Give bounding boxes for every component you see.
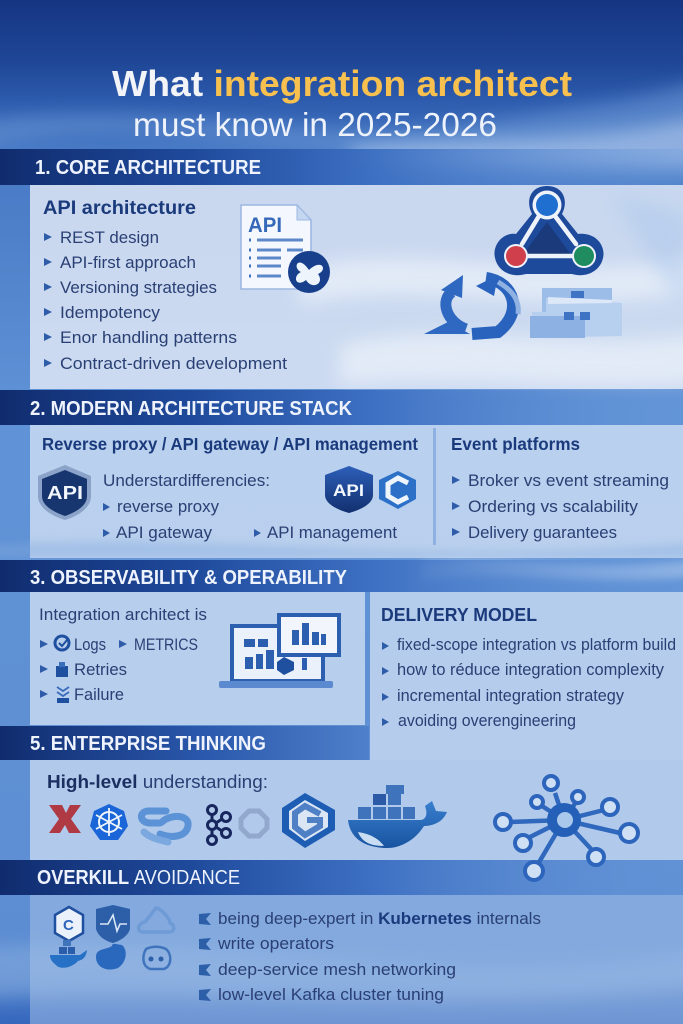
icon: cloud bbox=[139, 908, 174, 932]
list: overkill items: write operators bbox=[217, 934, 334, 953]
icon: hexagon C bbox=[379, 471, 416, 509]
icon: X bbox=[49, 805, 81, 833]
list: delivery model bbox=[382, 635, 676, 730]
text: high-level understanding: High-level understanding: bbox=[47, 772, 268, 792]
icon: blue swirl bbox=[141, 811, 188, 842]
icon: shield pulse bbox=[96, 905, 130, 943]
icon: kafka bbox=[208, 806, 230, 844]
icon: speech bubble bbox=[143, 947, 170, 969]
list: API architecture topics bbox=[44, 228, 287, 373]
heading: delivery model: DELIVERY MODEL bbox=[381, 605, 537, 625]
list: overkill items bbox=[199, 909, 541, 1004]
icon: kubernetes bbox=[90, 804, 128, 840]
icon: hub and spoke network bbox=[495, 776, 638, 880]
icon: laptop dashboards bbox=[219, 615, 339, 688]
list: observability items: Logs bbox=[74, 635, 106, 654]
icon: API shield: API bbox=[47, 483, 83, 503]
title: What integration architect bbox=[112, 63, 572, 104]
icon: API document bbox=[241, 205, 330, 293]
section 1 header bar: 1. CORE ARCHITECTURE bbox=[35, 157, 261, 179]
text: differences: Understardifferencies: bbox=[103, 471, 270, 490]
list: delivery model: incremental integration strategy bbox=[397, 686, 624, 705]
section 3 header bar bbox=[0, 560, 683, 592]
list: observability items: Failure bbox=[74, 685, 124, 704]
panel: delivery model bbox=[370, 592, 683, 760]
section 5 header bar bbox=[0, 726, 369, 760]
icon: API document: API bbox=[248, 214, 282, 237]
icon: hexagon C small: C bbox=[63, 917, 74, 934]
list: delivery model: how to réduce integration complexity bbox=[397, 660, 664, 679]
section overkill header bar bbox=[0, 860, 683, 895]
list: gateway items: API gateway bbox=[116, 523, 212, 542]
list: API architecture topics: Versioning strategies bbox=[60, 278, 217, 297]
heading: event platforms: Event platforms bbox=[451, 434, 580, 454]
section 5 header bar: 5. ENTERPRISE THINKING bbox=[30, 733, 266, 755]
section 2 header bar: 2. MODERN ARCHITECTURE STACK bbox=[30, 398, 353, 420]
list: API architecture topics: Contract-driven development bbox=[60, 354, 287, 373]
panel: observability bbox=[30, 592, 365, 725]
icon: isometric boxes bbox=[530, 288, 622, 338]
list: API architecture topics: Idempotency bbox=[60, 303, 161, 322]
list: gateway items: API management bbox=[267, 523, 397, 542]
section overkill header bar: OVERKILL AVOIDANCE bbox=[37, 867, 240, 889]
list: observability items: Retries bbox=[74, 660, 127, 679]
icon: hexagon C small bbox=[55, 907, 83, 941]
panel: modern architecture stack bbox=[0, 425, 683, 558]
heading: API architecture: API architecture bbox=[43, 198, 196, 219]
section 3 header bar: 3. OBSERVABILITY & OPERABILITY bbox=[30, 567, 348, 589]
list: gateway items bbox=[103, 497, 397, 542]
list: event platforms bbox=[452, 471, 669, 542]
panel: enterprise thinking bbox=[30, 760, 683, 860]
panel: core architecture bbox=[30, 185, 683, 389]
list: API architecture topics: API-first approach bbox=[60, 253, 196, 272]
icon: API shield small bbox=[325, 466, 373, 513]
list: overkill items: being deep-expert in Kubernetes internals bbox=[218, 909, 541, 928]
list: event platforms: Broker vs event streaming bbox=[468, 471, 669, 490]
icon: small whale bbox=[50, 940, 87, 968]
icon: hexagon G bbox=[282, 793, 335, 848]
list: API architecture topics: Enor handling patterns bbox=[60, 328, 237, 347]
heading: reverse proxy gateway management: Reverse proxy / API gateway / API management bbox=[42, 434, 418, 454]
list: delivery model: avoiding overengineering bbox=[398, 711, 576, 730]
list: event platforms: Ordering vs scalability bbox=[468, 497, 639, 516]
title: must know in 2025-2026 bbox=[133, 106, 497, 143]
icon: API shield bbox=[38, 465, 91, 520]
list: observability items bbox=[40, 635, 198, 704]
list: event platforms: Delivery guarantees bbox=[468, 523, 617, 542]
list: overkill items: deep-service mesh networking bbox=[218, 960, 456, 979]
list: API architecture topics: REST design bbox=[60, 228, 159, 247]
section 1 header bar bbox=[0, 149, 683, 185]
title bbox=[112, 63, 572, 143]
icon: small swirl bbox=[96, 944, 126, 970]
panel: overkill avoidance bbox=[30, 895, 683, 1024]
icon: API shield small: API bbox=[333, 481, 364, 500]
list: overkill items: low-level Kafka cluster tuning bbox=[218, 985, 444, 1004]
list: gateway items: reverse proxy bbox=[117, 497, 219, 516]
text: integration architect is: Integration architect is bbox=[39, 605, 207, 624]
icon: circular arrows bbox=[424, 275, 518, 334]
icon: ring bbox=[241, 811, 267, 836]
section 2 header bar bbox=[0, 390, 683, 425]
list: observability items: METRICS bbox=[134, 635, 198, 654]
icon: docker whale bbox=[348, 785, 447, 848]
icon: connected triangle network bbox=[494, 186, 604, 275]
